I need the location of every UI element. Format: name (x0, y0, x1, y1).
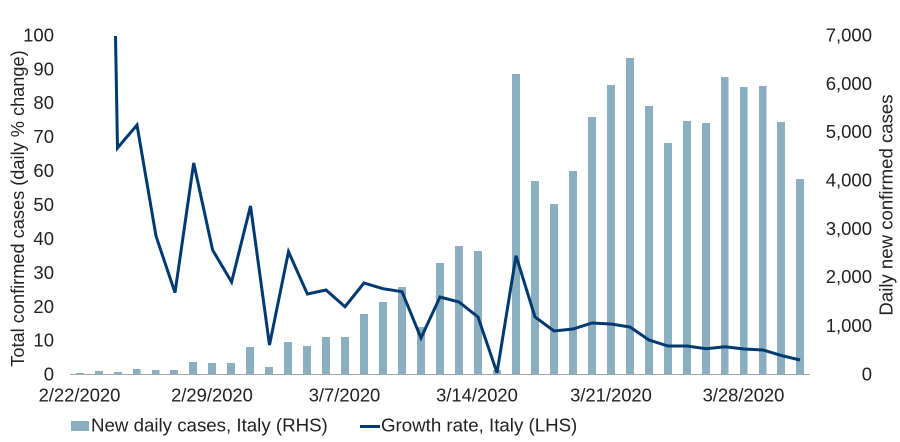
legend: new daily cases: New daily cases, Italy (RHS) (91, 414, 328, 436)
left axis labels: 90 (33, 58, 54, 80)
x axis date labels (39, 384, 784, 406)
right axis labels: 2,000 (826, 266, 872, 287)
left axis labels: 0 (44, 364, 54, 384)
right axis labels: 7,000 (826, 24, 872, 46)
left axis labels: 40 (33, 228, 54, 249)
x axis date labels: 2/29/2020 (171, 384, 253, 406)
x axis date labels: 3/7/2020 (309, 384, 380, 406)
x axis date labels: 3/21/2020 (570, 384, 652, 406)
right axis labels: 0 (862, 364, 872, 384)
right axis labels: 4,000 (826, 170, 872, 190)
left axis labels: 80 (33, 92, 54, 113)
left axis labels (23, 24, 54, 384)
line: growth rate (LHS) (116, 36, 800, 373)
left axis labels: 70 (33, 126, 54, 147)
bars: new daily cases (RHS) (76, 58, 804, 374)
x axis date labels: 3/28/2020 (703, 384, 784, 406)
right axis labels: 6,000 (826, 73, 872, 94)
right axis title: Daily new confirmed cases (876, 94, 896, 316)
left axis labels: 20 (33, 296, 54, 317)
left axis title: Total confirmed cases (daily % change) (8, 50, 28, 367)
legend: growth rate: Growth rate, Italy (LHS) (381, 414, 577, 436)
x axis date labels: 2/22/2020 (39, 384, 120, 406)
x axis date labels: 3/14/2020 (436, 384, 518, 406)
left axis labels: 60 (33, 160, 54, 181)
left axis labels: 50 (33, 194, 54, 215)
right axis labels (826, 24, 872, 384)
right axis labels: 3,000 (826, 218, 872, 239)
left axis labels: 100 (23, 24, 54, 46)
left axis labels: 30 (33, 262, 54, 283)
right axis labels: 1,000 (826, 315, 872, 336)
left axis labels: 10 (33, 330, 54, 350)
x axis line (70, 374, 810, 376)
right axis labels: 5,000 (826, 121, 872, 142)
